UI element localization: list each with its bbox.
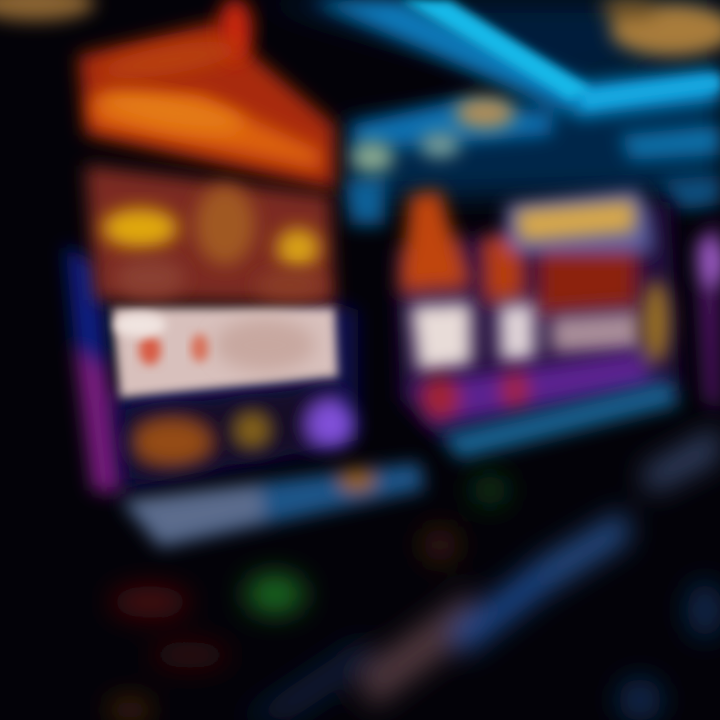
reel band (410, 302, 640, 372)
lower panel lights (125, 385, 354, 480)
ceiling lamps (0, 0, 720, 173)
ceiling lights (260, 0, 720, 225)
far right machine (695, 220, 720, 410)
machine deck (120, 462, 425, 548)
white reel band (112, 308, 338, 398)
floor reflections (108, 425, 720, 720)
right slot machine (395, 190, 680, 460)
left slot machine (65, 0, 425, 548)
marquee (515, 200, 635, 242)
deck (440, 380, 680, 460)
upper reel panel (85, 165, 335, 305)
lower lights (410, 280, 670, 425)
machine topper (78, 0, 335, 190)
side trim: blue and magenta (65, 245, 358, 495)
